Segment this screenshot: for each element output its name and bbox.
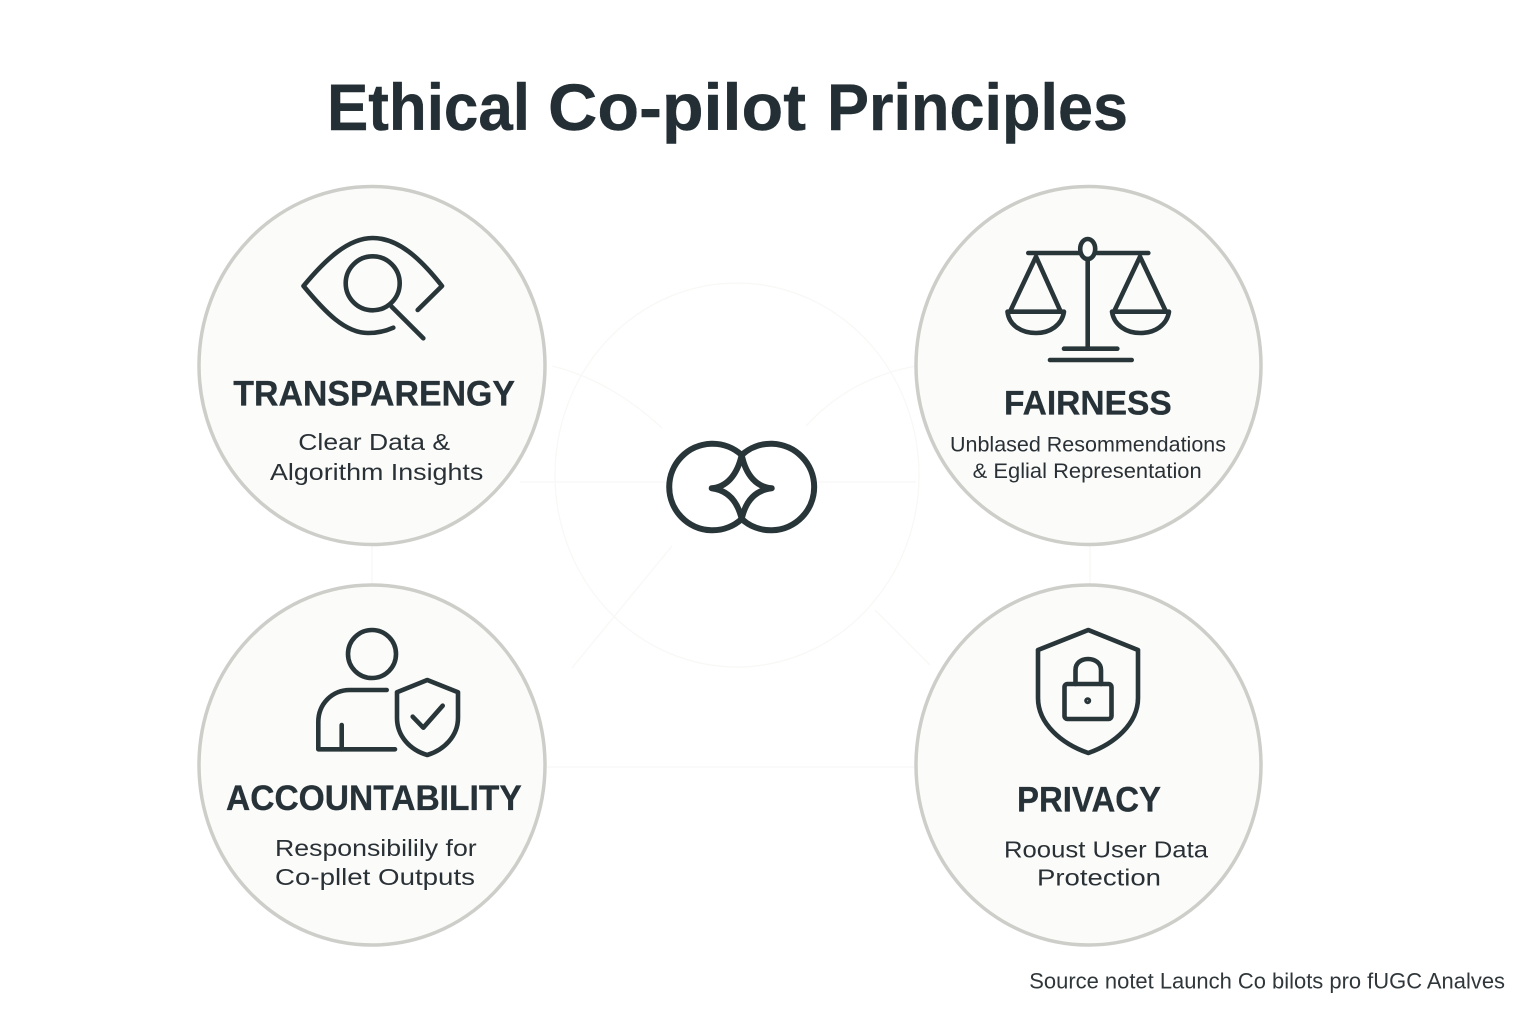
heading: privacy: PRIVACY [1017, 781, 1161, 820]
title [327, 70, 1128, 144]
panel: transparency [199, 186, 545, 544]
icon: shield with padlock [1038, 630, 1138, 753]
panel: privacy [916, 585, 1261, 945]
description: privacy: Rooust User Data [1004, 837, 1208, 863]
central icon: linked co-pilot loops [669, 444, 814, 530]
title: Principles [827, 70, 1128, 144]
description: fairness [950, 434, 1226, 483]
description: accountability: Co-pllet Outputs [275, 864, 475, 890]
icon: eye with magnifier [304, 238, 442, 338]
description: transparency [270, 429, 483, 485]
description: privacy: Protection [1037, 865, 1161, 891]
description: fairness: & Eglial Representation [973, 460, 1202, 483]
title: Ethical [327, 70, 530, 144]
description: transparency: Clear Data & [298, 429, 450, 455]
heading: accountability: ACCOUNTABILITY [226, 779, 522, 818]
heading: fairness: FAIRNESS [1004, 384, 1172, 422]
source note: Source notet Launch Co bilots pro fUGC Analves [1029, 968, 1505, 993]
description: accountability [275, 835, 477, 890]
description: transparency: Algorithm Insights [270, 459, 483, 485]
panel: fairness [916, 186, 1261, 544]
title: Co-pilot [548, 70, 806, 144]
panel: accountability [199, 585, 545, 945]
description: privacy [1004, 837, 1208, 891]
icon: balance scale [1008, 239, 1169, 360]
heading: transparency: TRANSPARENGY [233, 375, 515, 414]
icon: person with shield [318, 630, 458, 755]
description: fairness: Unblased Resommendations [950, 434, 1226, 457]
description: accountability: Responsibilily for [275, 835, 477, 861]
